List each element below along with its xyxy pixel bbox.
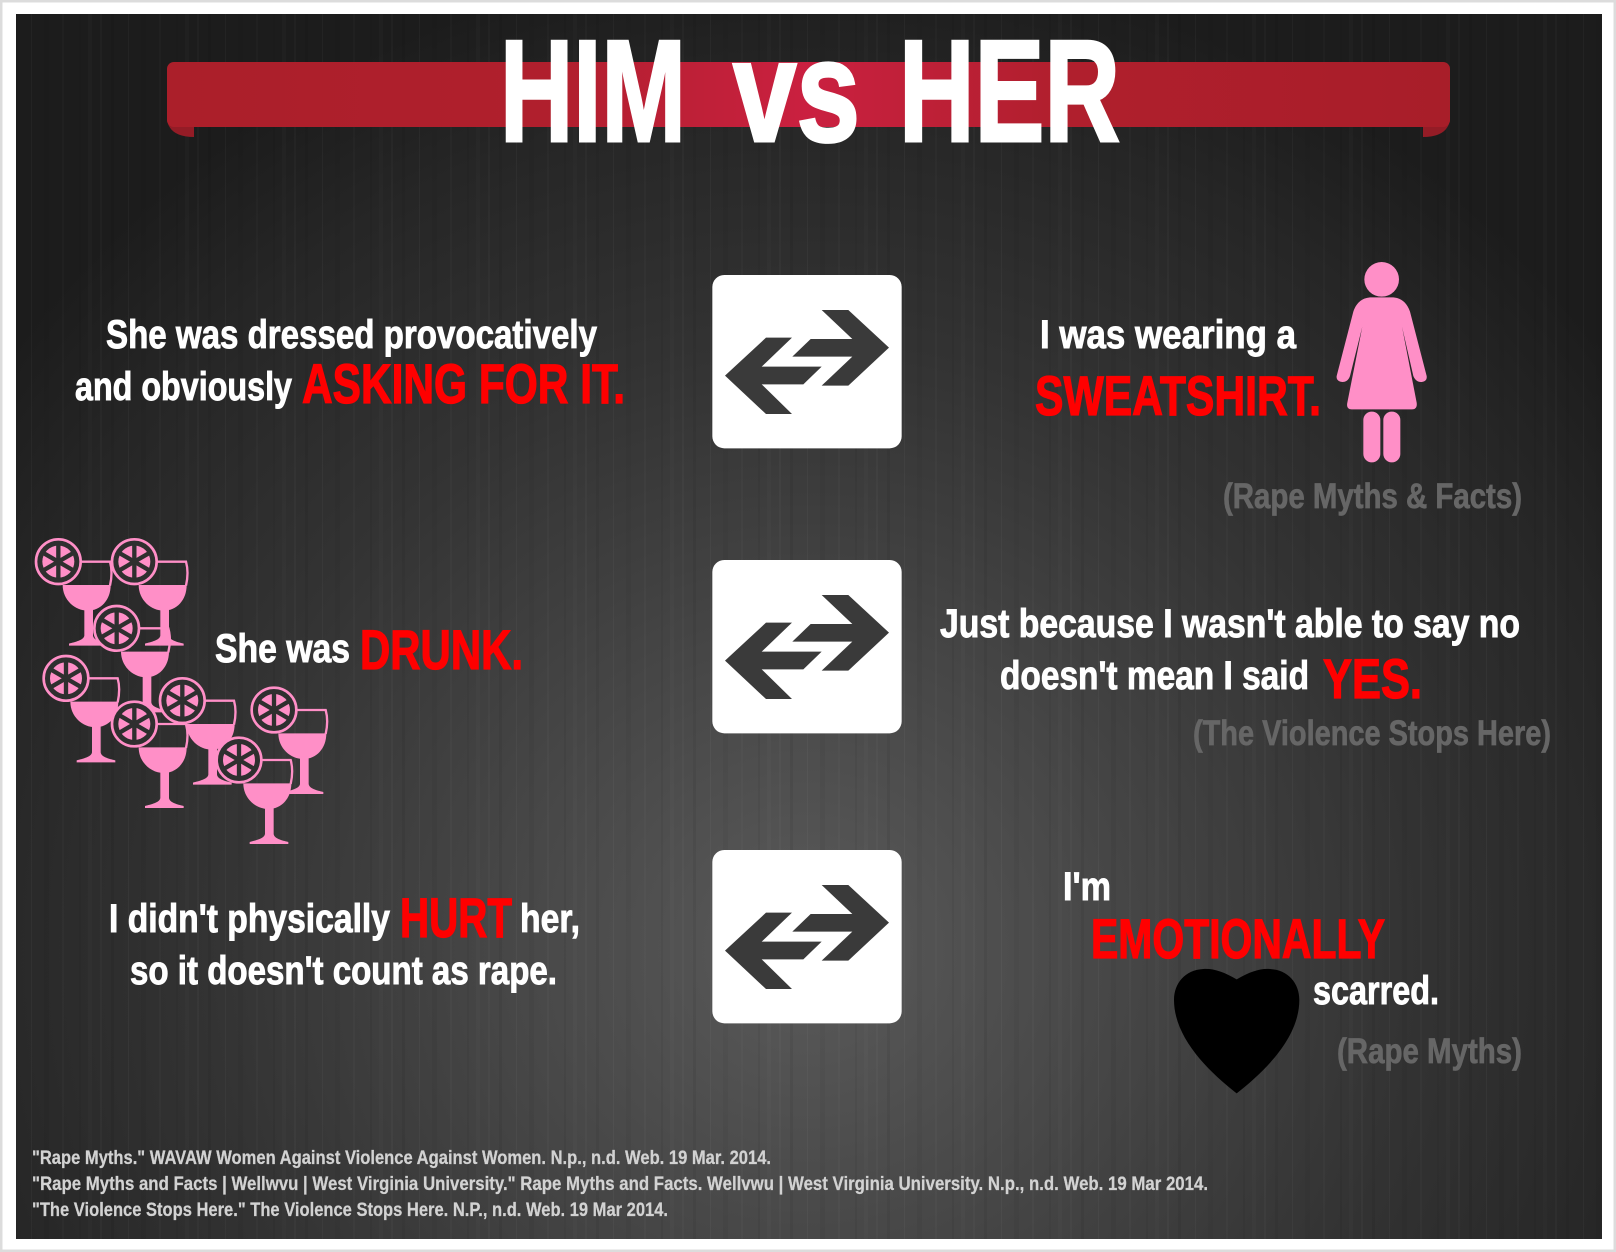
row 2 right statement [940, 602, 1520, 710]
row 1 right statement: I was wearing a [1040, 313, 1297, 357]
row 1 right statement [1035, 313, 1321, 427]
row 2 left statement: She was [215, 627, 350, 671]
title: vs [733, 10, 860, 172]
row 3 left statement [109, 886, 580, 993]
row 3 left statement: I didn't physically [109, 897, 391, 941]
icon: wine glasses [36, 539, 327, 844]
references: "The Violence Stops Here." The Violence Stops Here. N.P., n.d. Web. 19 Mar 2014. [32, 1199, 668, 1221]
source: Rape Myths and Facts: (Rape Myths & Facts) [1223, 477, 1522, 516]
icon: swap arrows row 3 [712, 850, 902, 1023]
row 3 right statement [1063, 865, 1439, 1013]
source: Rape Myths: (Rape Myths) [1337, 1032, 1522, 1071]
title: HER [899, 10, 1120, 172]
row 2 left statement [215, 618, 523, 681]
references: "Rape Myths and Facts | Wellwvu | West Virginia University." Rape Myths and Facts. Wellvwu | West Virginia University. N.p., n.d. Web. 19 Mar 2014. [32, 1173, 1208, 1195]
icon: woman [1337, 262, 1427, 462]
row 2 left statement: DRUNK. [360, 618, 523, 681]
row 3 right statement: I'm [1063, 865, 1111, 909]
icon: swap arrows row 2 [712, 560, 902, 733]
icon: heart [1174, 969, 1299, 1093]
row 1 right statement: SWEATSHIRT. [1035, 364, 1321, 427]
row 1 left statement: She was dressed provocatively [106, 313, 598, 357]
row 3 left statement: HURT [400, 886, 512, 949]
title: HIM [500, 10, 686, 172]
title [500, 10, 1120, 172]
row 2 right statement: YES. [1323, 647, 1422, 710]
row 1 left statement: ASKING FOR IT. [302, 352, 625, 415]
row 3 left statement: her, [520, 897, 580, 941]
row 1 left statement: and obviously [75, 365, 293, 409]
row 3 left statement: so it doesn't count as rape. [130, 949, 557, 993]
row 3 right statement: scarred. [1313, 969, 1439, 1013]
references: "Rape Myths." WAVAW Women Against Violence Against Women. N.p., n.d. Web. 19 Mar. 2014. [32, 1147, 771, 1169]
references [32, 1147, 1208, 1221]
ribbon banner [167, 62, 1450, 137]
icon: swap arrows row 1 [712, 275, 902, 448]
row 2 right statement: Just because I wasn't able to say no [940, 602, 1520, 646]
row 3 right statement: EMOTIONALLY [1091, 907, 1385, 970]
row 1 left statement [75, 313, 625, 415]
row 2 right statement: doesn't mean I said [1000, 654, 1309, 698]
source: The Violence Stops Here: (The Violence Stops Here) [1193, 714, 1551, 753]
